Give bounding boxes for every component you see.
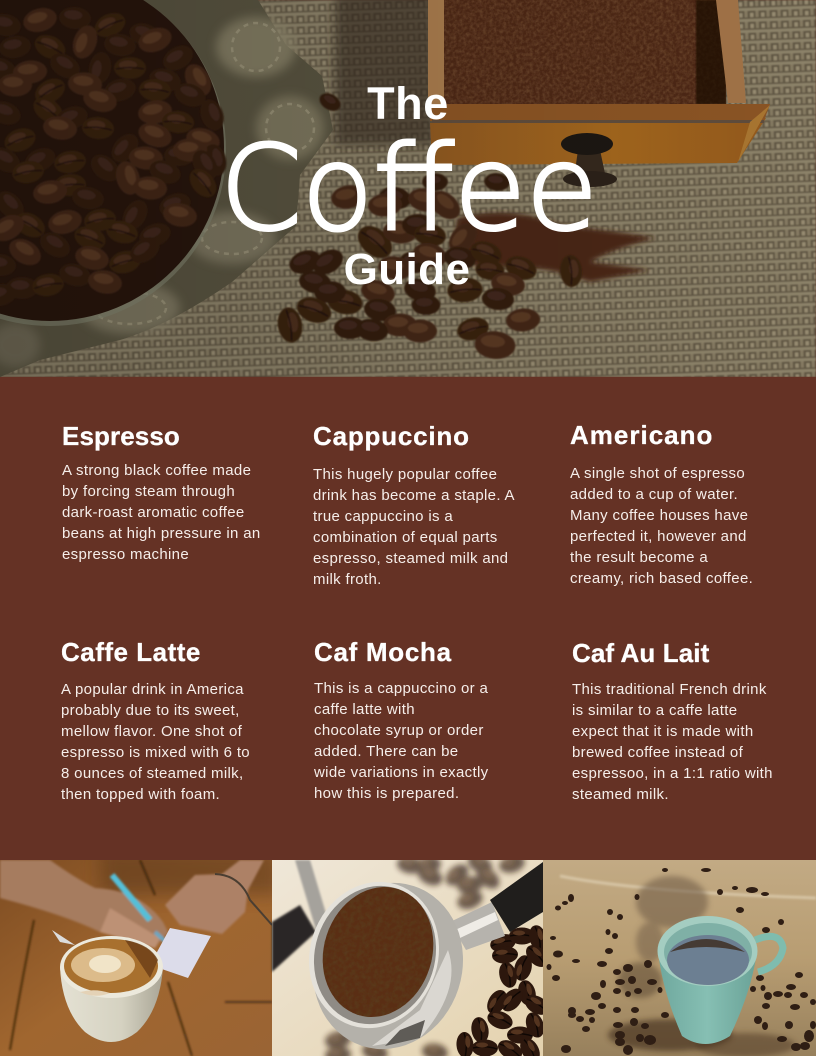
title line: Coffee: Coffee (220, 120, 598, 257)
description: milk froth. (313, 571, 382, 588)
description (572, 681, 773, 803)
photo: portafilter with ground coffee (272, 850, 553, 1056)
description: how this is prepared. (314, 785, 459, 802)
panel: coffee types (0, 377, 816, 860)
card: Caf Au Lait (572, 638, 773, 803)
portafilter handle (450, 862, 543, 950)
description (61, 681, 250, 803)
description: A popular drink in America (61, 681, 244, 698)
card: Americano (570, 420, 753, 587)
description (313, 466, 515, 588)
burlap background (0, 0, 816, 377)
description: then topped with foam. (61, 786, 220, 803)
wooden drawer with ground coffee (428, 0, 770, 187)
card: Caffe Latte (61, 637, 250, 803)
description: creamy, rich based coffee. (570, 570, 753, 587)
heading: Americano (570, 420, 713, 450)
spilled coffee grounds (456, 213, 655, 282)
description: added. There can be (314, 743, 458, 760)
heading: Caf Mocha (314, 637, 452, 667)
description: dark-roast aromatic coffee (62, 504, 245, 521)
description: true cappuccino is a (313, 508, 453, 525)
background beans (324, 850, 553, 1056)
heading: Caf Au Lait (572, 638, 709, 668)
drawer knob (561, 133, 617, 187)
description: combination of equal parts (313, 529, 498, 546)
tamper on the left (272, 860, 328, 972)
heading: Espresso (62, 421, 180, 451)
hero shading (0, 0, 816, 377)
heading: Caffe Latte (61, 637, 201, 667)
description: probably due to its sweet, (61, 702, 240, 719)
description (570, 465, 753, 587)
teal cup (658, 916, 783, 1044)
description: 8 ounces of steamed milk, (61, 765, 244, 782)
description: Many coffee houses have (570, 507, 748, 524)
description: caffe latte with (314, 701, 415, 718)
description: A strong black coffee made (62, 462, 251, 479)
photo: latte on wooden table (0, 850, 280, 1056)
description: chocolate syrup or order (314, 722, 484, 739)
description: This traditional French drink (572, 681, 767, 698)
dark burlap behind plate and drawer (335, 0, 435, 145)
description: espresso, steamed milk and (313, 550, 508, 567)
description: steamed milk. (572, 786, 669, 803)
latte cup (60, 936, 163, 1042)
description: perfected it, however and (570, 528, 747, 545)
card: Caf Mocha (314, 637, 488, 802)
cup handle (755, 936, 783, 972)
description (62, 462, 261, 563)
left hand holding pen (0, 860, 168, 948)
ground coffee (306, 873, 450, 1031)
description: mellow flavor. One shot of (61, 723, 242, 740)
card: Espresso (62, 421, 261, 563)
description: wide variations in exactly (314, 764, 488, 781)
description: beans at high pressure in an (62, 525, 261, 542)
card: Cappuccino (313, 421, 515, 588)
scattered beans (546, 868, 816, 1055)
title block (220, 78, 598, 294)
drawer rim and front face (430, 104, 770, 165)
photo strip (0, 860, 816, 1056)
description: the result become a (570, 549, 708, 566)
notepad (150, 928, 211, 978)
description: brewed coffee instead of (572, 744, 743, 761)
description: expect that it is made with (572, 723, 754, 740)
description: A single shot of espresso (570, 465, 745, 482)
title line: Guide: Guide (344, 245, 470, 294)
background bean cluster (636, 876, 708, 928)
heading: Cappuccino (313, 421, 470, 451)
description: espressoo, in a 1:1 ratio with (572, 765, 773, 782)
metal plate (0, 0, 333, 377)
description: by forcing steam through (62, 483, 235, 500)
foreground bean cluster (618, 962, 662, 998)
description: This is a cappuccino or a (314, 680, 488, 697)
description: espresso is mixed with 6 to (61, 744, 250, 761)
description (314, 680, 488, 802)
portafilter basket (290, 863, 484, 1056)
photo: teal cup on burlap with beans (543, 860, 816, 1056)
description: espresso machine (62, 546, 189, 563)
title line: The: The (367, 78, 449, 129)
description: added to a cup of water. (570, 486, 738, 503)
description: is similar to a caffe latte (572, 702, 737, 719)
scattered coffee beans (275, 90, 583, 361)
hero photo: coffee beans, plate and grinder drawer on burlap (0, 0, 816, 377)
coffee beans on plate (0, 0, 230, 326)
description: This hugely popular coffee (313, 466, 497, 483)
right hand (165, 860, 264, 934)
description: drink has become a staple. A (313, 487, 515, 504)
